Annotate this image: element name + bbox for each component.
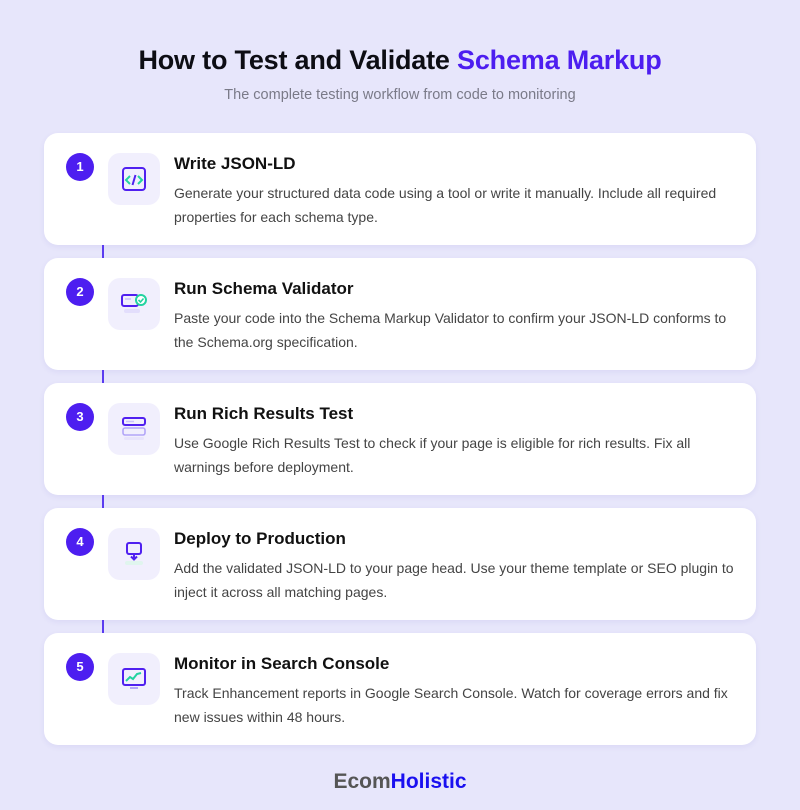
card 2: validator — [44, 258, 756, 370]
title: How to Test and Validate Schema Markup — [138, 45, 662, 75]
card 3: rich results — [44, 383, 756, 495]
badge 2 — [66, 278, 94, 306]
badge 3: 3 — [76, 409, 84, 424]
badge 1: 1 — [76, 159, 84, 174]
card 4: deploy — [44, 508, 756, 620]
subtitle: The complete testing workflow from code to monitoring — [224, 87, 576, 103]
description: Add the validated JSON-LD to your page head. Use your theme template or SEO plugin to inject it across all matching pages. — [174, 560, 734, 600]
icon: monitor chart — [108, 653, 160, 705]
heading: Run Rich Results Test — [174, 404, 353, 423]
heading: Deploy to Production — [174, 529, 346, 548]
icon: deploy — [108, 528, 160, 580]
footer logo: EcomHolistic — [333, 770, 467, 793]
card 5: monitor — [44, 633, 756, 745]
badge 5 — [66, 653, 94, 681]
icon: code — [108, 153, 160, 205]
description: Paste your code into the Schema Markup Validator to confirm your JSON-LD conforms to the Schema.org specification. — [174, 310, 726, 350]
description: Use Google Rich Results Test to check if your page is eligible for rich results. Fix all warnings before deployment. — [174, 435, 690, 475]
heading: Run Schema Validator — [174, 279, 354, 298]
badge 4: 4 — [76, 534, 84, 549]
badge 4 — [66, 528, 94, 556]
icon: validate — [108, 278, 160, 330]
heading: Write JSON-LD — [174, 154, 296, 173]
badge 2: 2 — [76, 284, 84, 299]
card 1: write JSON-LD — [44, 133, 756, 245]
badge 1 — [66, 153, 94, 181]
badge 5: 5 — [76, 659, 84, 674]
description: Track Enhancement reports in Google Search Console. Watch for coverage errors and fix new issues within 48 hours. — [174, 685, 728, 725]
badge 3 — [66, 403, 94, 431]
heading: Monitor in Search Console — [174, 654, 389, 673]
description: Generate your structured data code using a tool or write it manually. Include all required properties for each schema type. — [174, 185, 716, 225]
icon: results — [108, 403, 160, 455]
